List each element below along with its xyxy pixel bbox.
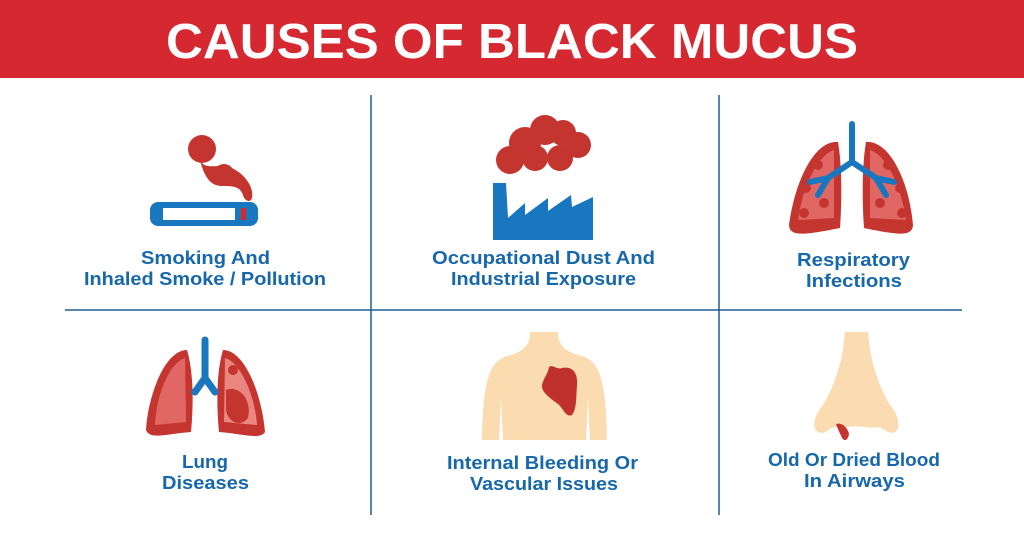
panel: respiratory infections: [789, 124, 913, 291]
icon: factory with cloud: [493, 115, 593, 240]
label: respiratory: Respiratory: [797, 250, 910, 270]
label: internal bleeding: Vascular Issues: [470, 474, 618, 494]
icon: torso with bleeding: [482, 332, 607, 440]
label: dried blood: [768, 450, 940, 491]
title: CAUSES OF BLACK MUCUS: [166, 15, 858, 69]
panel: dried blood: [768, 332, 940, 491]
header band: [0, 0, 1024, 78]
icon: infected lungs: [789, 124, 913, 234]
label: lung diseases: [162, 452, 249, 493]
panel: smoking: [84, 135, 326, 289]
label: lung diseases: Lung: [182, 452, 228, 472]
label: occupational: Occupational Dust And: [432, 248, 655, 268]
label: internal bleeding: [447, 453, 638, 494]
panel: lung diseases: [146, 340, 265, 493]
icon: cigarette with smoke: [150, 135, 258, 226]
label: occupational: [432, 248, 655, 289]
label: lung diseases: Diseases: [162, 473, 249, 493]
label: respiratory: Infections: [806, 271, 902, 291]
panel: internal bleeding: [447, 332, 638, 494]
label: smoking: Smoking And: [141, 248, 270, 268]
label: occupational: Industrial Exposure: [451, 269, 636, 289]
icon: diseased lungs: [146, 340, 265, 436]
label: dried blood: In Airways: [804, 471, 905, 491]
label: dried blood: Old Or Dried Blood: [768, 450, 940, 470]
label: smoking: [84, 248, 326, 289]
panel: occupational dust: [432, 115, 655, 289]
label: respiratory: [797, 250, 910, 291]
icon: nose with blood: [814, 332, 898, 440]
label: smoking: Inhaled Smoke / Pollution: [84, 269, 326, 289]
label: internal bleeding: Internal Bleeding Or: [447, 453, 638, 473]
